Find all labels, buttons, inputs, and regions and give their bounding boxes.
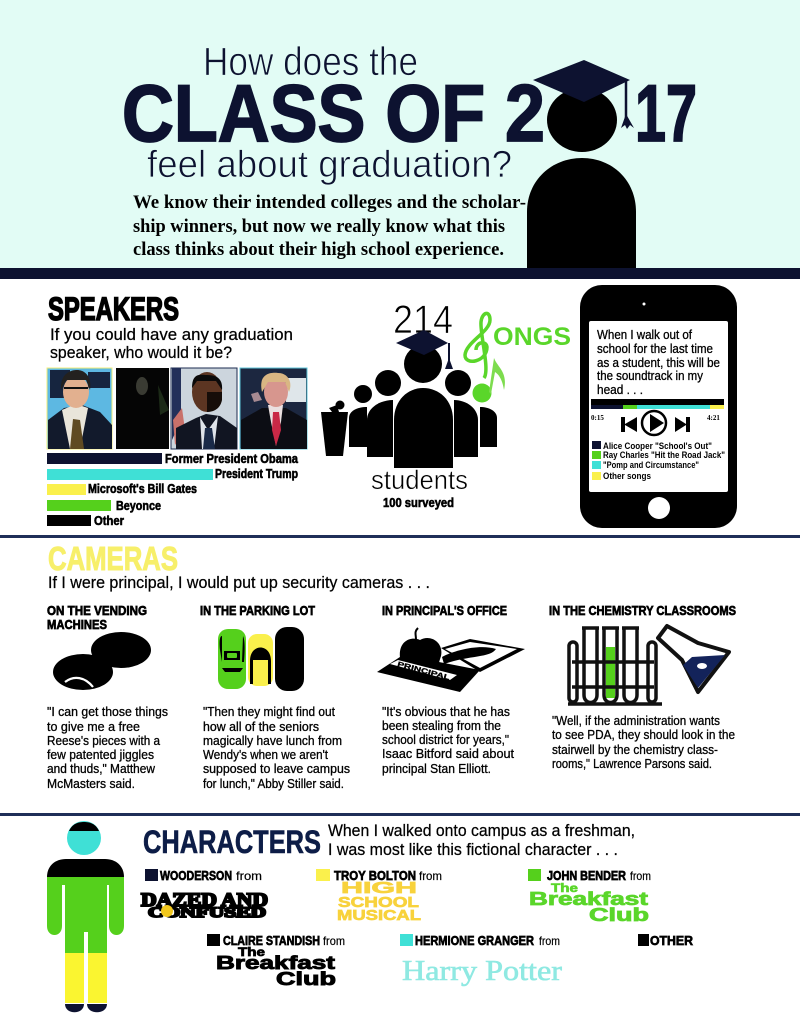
column: principal's office — [377, 603, 525, 776]
heading: characters: CHARACTERS — [143, 824, 321, 860]
panel: students — [321, 298, 497, 510]
quote: been stealing from the — [382, 718, 501, 733]
legend: Troy Bolton: from — [419, 869, 442, 883]
phone text — [597, 327, 720, 397]
player times — [591, 414, 720, 422]
phone text: as a student, this will be — [597, 355, 720, 370]
quote: "It's obvious that he has — [382, 704, 510, 719]
progress bar — [591, 399, 724, 409]
icon: parked cars — [218, 627, 304, 691]
intro text: ship winners, but now we really know what this — [133, 216, 505, 237]
legend: Other: OTHER — [650, 933, 694, 948]
legend: Hermione Granger: HERMIONE GRANGER — [415, 933, 535, 948]
intro text: We know their intended colleges and the scholar- — [133, 192, 526, 213]
panel: speakers — [47, 291, 307, 528]
logo: Harry Potter: Harry Potter — [402, 956, 563, 987]
quote: supposed to leave campus — [203, 761, 350, 776]
panel: header — [0, 0, 800, 268]
photo: Bill Gates — [47, 368, 112, 449]
speakers question: If you could have any graduation — [50, 325, 293, 344]
legend: John Bender: from — [630, 869, 651, 883]
photo: Barack Obama — [171, 368, 237, 449]
characters question: I was most like this fictional character . . . — [328, 840, 618, 859]
quote: few patented jiggles — [47, 747, 154, 762]
quote: and thuds," Matthew — [47, 761, 156, 776]
songs legend: Alice Cooper "School's Out" — [603, 441, 712, 451]
students label: students — [371, 465, 468, 495]
cameras question: If I were principal, I would put up security cameras . . . — [48, 573, 430, 592]
logo: The Breakfast Club, green: Breakfast — [529, 889, 648, 909]
panel: cameras — [47, 540, 736, 791]
quote: McMasters said. — [47, 776, 135, 791]
songs legend: Other songs — [603, 471, 651, 481]
title: Class of 2: CLASS OF 2 — [122, 69, 545, 159]
column heading: MACHINES — [47, 617, 107, 632]
photo: Donald Trump — [240, 368, 307, 449]
icon: person colored by results — [47, 821, 124, 1012]
bar chart: speakers — [47, 451, 299, 528]
column: parking lot — [200, 603, 350, 791]
characters question — [328, 821, 635, 859]
bar chart: speakers: Microsoft's Bill Gates — [88, 481, 197, 496]
quote: to see PDA, they should look in the — [552, 727, 735, 742]
bar chart: speakers: Other — [94, 513, 124, 528]
phone text: When I walk out of — [597, 327, 692, 342]
songs text: ONGS — [493, 323, 571, 351]
legend: John Bender: JOHN BENDER — [547, 868, 627, 883]
icon: graduate silhouette — [527, 60, 636, 268]
legend: Claire Standish: from — [323, 934, 345, 948]
quote: "I can get those things — [47, 704, 168, 719]
logo: The Breakfast Club, black: Club — [276, 969, 336, 989]
quote: Wendy's when we aren't — [203, 747, 328, 762]
quote: to give me a free — [47, 719, 140, 734]
intro text — [133, 192, 526, 260]
column heading — [47, 603, 147, 632]
column heading: IN THE PARKING LOT — [200, 603, 315, 618]
panel: characters — [47, 821, 694, 1012]
bar chart: speakers: Beyonce — [116, 498, 161, 513]
quote: rooms," Lawrence Parsons said. — [552, 756, 712, 771]
heading: speakers: SPEAKERS — [48, 291, 179, 327]
logo: Dazed and Confused — [141, 890, 268, 921]
icon: peanut butter cups — [53, 632, 151, 690]
quote: principal Stan Elliott. — [382, 761, 491, 776]
section divider — [0, 813, 800, 816]
heading: cameras: CAMERAS — [48, 540, 178, 577]
icon: flask — [658, 626, 729, 692]
logo: High School Musical: SCHOOL — [338, 894, 419, 911]
legend: Claire Standish: CLAIRE STANDISH — [223, 933, 320, 948]
logo: The Breakfast Club, green — [529, 881, 649, 925]
icon: test tube rack — [568, 628, 662, 704]
title: How does the: How does the — [203, 40, 418, 84]
icon: crowd of students — [349, 330, 497, 468]
logo: High School Musical — [337, 880, 421, 924]
phone text: head . . . — [597, 382, 643, 397]
header band — [0, 268, 800, 279]
logo: The Breakfast Club, black: The — [238, 945, 265, 959]
player times: 4:21 — [707, 414, 720, 422]
songs legend — [592, 441, 725, 481]
title: 17: 17 — [635, 69, 697, 159]
quote: magically have lunch from — [203, 733, 342, 748]
bar chart: speakers: Former President Obama — [165, 451, 299, 466]
legend: Wooderson: from — [236, 869, 262, 883]
phone text: school for the last time — [597, 341, 713, 356]
quote: for lunch," Abby Stiller said. — [203, 776, 344, 791]
quote: Reese's pieces with a — [47, 733, 161, 748]
quote: "Then they might find out — [203, 704, 335, 719]
logo: High School Musical: HIGH — [341, 880, 417, 897]
songs legend: "Pomp and Circumstance" — [603, 460, 699, 470]
stat: 214: 214 — [393, 298, 453, 342]
quote — [47, 704, 168, 791]
quote: how all of the seniors — [203, 719, 319, 734]
logo: The Breakfast Club, green: The — [551, 881, 578, 895]
icon: treble clef — [465, 313, 490, 378]
quote: stairwell by the chemistry class- — [552, 742, 718, 757]
icon: player controls — [621, 411, 690, 435]
quote: school district for years," — [382, 732, 509, 747]
column heading: ON THE VENDING — [47, 603, 147, 618]
quote — [203, 704, 350, 791]
column heading: IN PRINCIPAL'S OFFICE — [382, 603, 507, 618]
icon: podium — [321, 400, 348, 456]
speakers question — [50, 325, 293, 362]
section divider — [0, 535, 800, 538]
column: vending machines — [47, 603, 168, 791]
logo: The Breakfast Club, black: Breakfast — [216, 953, 335, 973]
quote — [552, 713, 735, 771]
bar chart: speakers: President Trump — [215, 466, 298, 481]
icon: apple and nameplate — [377, 628, 525, 692]
legend: Troy Bolton: TROY BOLTON — [334, 868, 416, 883]
legend: Wooderson: WOODERSON — [160, 868, 232, 883]
surveyed label: 100 surveyed — [383, 495, 454, 510]
panel: phone — [580, 285, 737, 528]
player times: 0:15 — [591, 414, 604, 422]
intro text: class thinks about their high school experience. — [133, 239, 504, 260]
column heading: IN THE CHEMISTRY CLASSROOMS — [549, 603, 736, 618]
legend: Hermione Granger: from — [539, 934, 560, 948]
logo: The Breakfast Club, black — [216, 945, 336, 989]
songs legend: Ray Charles "Hit the Road Jack" — [603, 450, 725, 460]
logo: High School Musical: MUSICAL — [337, 907, 421, 924]
quote: "Well, if the administration wants — [552, 713, 720, 728]
logo: Dazed and Confused: CONFUSED — [148, 905, 266, 921]
phone text: the soundtrack in my — [597, 368, 703, 383]
column: chemistry classrooms — [549, 603, 736, 771]
speakers question: speaker, who would it be? — [50, 343, 232, 362]
icon: music note — [472, 358, 505, 402]
characters question: When I walked onto campus as a freshman, — [328, 821, 635, 840]
heading: songs — [465, 313, 571, 402]
photo: Beyonce — [116, 368, 169, 449]
quote: Isaac Bitford said about — [382, 746, 514, 761]
logo: Dazed and Confused: DAZED AND — [141, 890, 268, 911]
icon: apple and nameplate: PRINCIPAL — [396, 661, 451, 682]
logo: The Breakfast Club, green: Club — [589, 905, 649, 925]
title: feel about graduation: feel about graduation? — [147, 144, 512, 186]
quote — [382, 704, 514, 776]
